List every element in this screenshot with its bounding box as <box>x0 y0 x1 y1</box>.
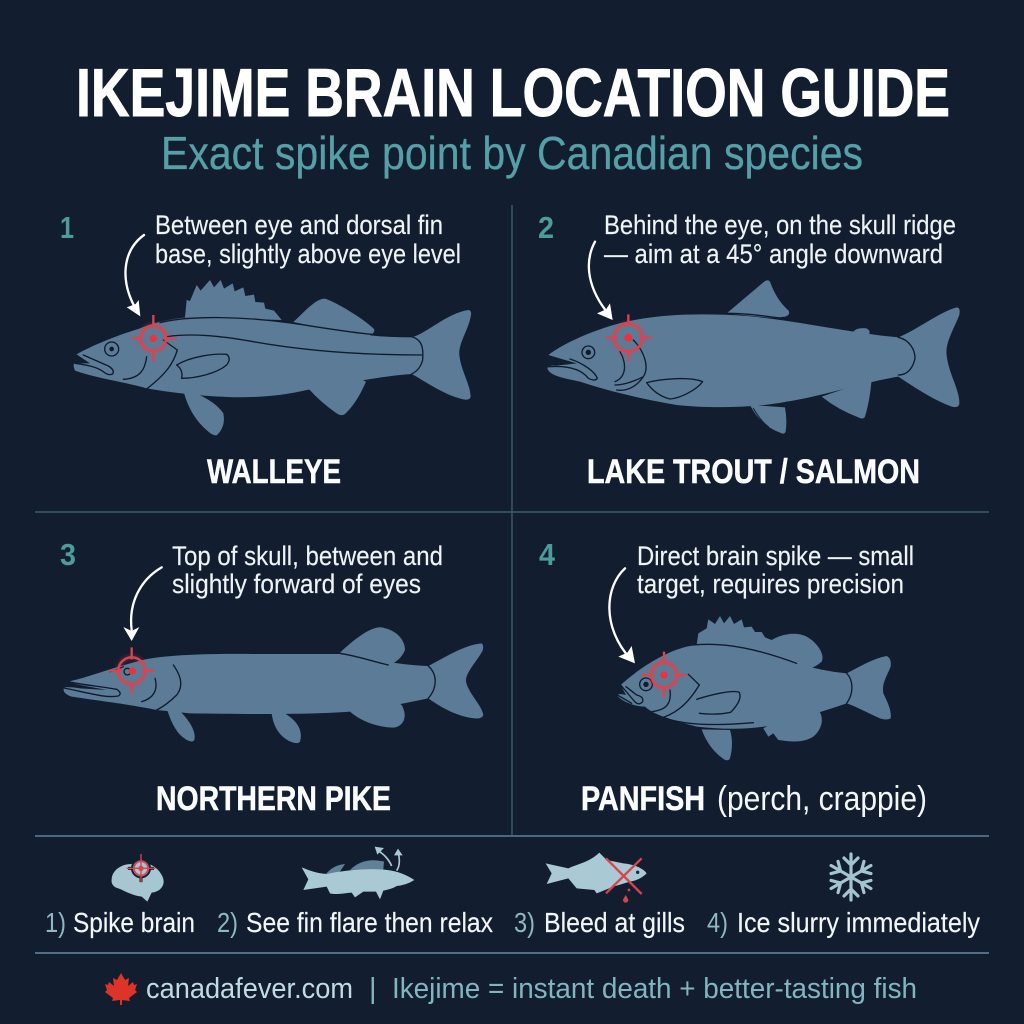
step 2 label: 2) <box>217 907 238 938</box>
process steps strip <box>45 847 980 938</box>
step number 1: 1 <box>60 210 74 245</box>
website: canadafever.com <box>146 973 353 1005</box>
panfish fish illustration <box>617 616 891 760</box>
footer <box>105 973 917 1005</box>
separator and tagline: Ikejime = instant death + better-tasting fish <box>392 973 917 1005</box>
step 1 label: Spike brain <box>73 907 195 938</box>
walleye fish illustration <box>74 280 471 435</box>
pike instruction text: Top of skull, between and <box>172 541 443 571</box>
trout instruction text <box>604 210 956 269</box>
panfish instruction text: target, requires precision <box>637 569 904 599</box>
step 4 label: Ice slurry immediately <box>737 907 980 938</box>
step number 3: 3 <box>60 537 76 572</box>
icon: brain with target <box>112 854 164 902</box>
icon: fish bleeding at gills with red X <box>546 853 647 903</box>
icon: maple leaf <box>105 973 137 1005</box>
trout instruction text: Behind the eye, on the skull ridge <box>604 210 956 240</box>
panel: northern pike <box>60 537 483 818</box>
icon: fish with flaring fins <box>302 847 414 899</box>
species name: walleye: WALLEYE <box>207 453 341 491</box>
icon: snowflake <box>828 854 874 900</box>
species name: panfish: (perch, crappie) <box>717 780 927 818</box>
target crosshair on pike <box>109 647 154 694</box>
step 3 label: Bleed at gills <box>544 907 685 938</box>
step 3 label: 3) <box>514 907 535 938</box>
panel: lake trout and salmon <box>538 210 960 491</box>
target crosshair on panfish <box>642 652 686 698</box>
lake trout fish illustration <box>547 280 960 434</box>
arrow to walleye target <box>125 235 144 316</box>
step number 2: 2 <box>538 210 554 245</box>
target crosshair on trout <box>606 314 652 361</box>
target crosshair on walleye <box>132 315 177 362</box>
species name: panfish: PANFISH <box>581 780 705 818</box>
step 2 label: See fin flare then relax <box>246 907 493 938</box>
walleye instruction text: Between eye and dorsal fin <box>155 210 443 240</box>
panfish instruction text: Direct brain spike — small <box>637 541 914 571</box>
walleye instruction text: base, slightly above eye level <box>155 239 461 269</box>
subtitle: Exact spike point by Canadian species <box>161 127 863 179</box>
arrow to pike target <box>123 567 162 641</box>
arrow to trout target <box>589 242 613 320</box>
separator and tagline: | <box>369 973 377 1005</box>
northern pike fish illustration <box>64 627 483 743</box>
panfish instruction text <box>637 541 914 599</box>
step 4 label: 4) <box>707 907 728 938</box>
trout instruction text: — aim at a 45° angle downward <box>604 239 943 269</box>
species name: northern pike: NORTHERN PIKE <box>156 780 391 818</box>
species name: lake trout and salmon: LAKE TROUT / SALMON <box>587 453 920 491</box>
step 1 label: 1) <box>45 907 66 938</box>
pike instruction text: slightly forward of eyes <box>172 569 421 599</box>
panel: panfish <box>539 537 927 818</box>
arrow to panfish target <box>609 568 635 663</box>
species name: panfish <box>581 780 927 818</box>
pike instruction text <box>172 541 443 599</box>
step number 4: 4 <box>539 537 556 572</box>
walleye instruction text <box>155 210 461 269</box>
panel: walleye <box>60 210 471 491</box>
